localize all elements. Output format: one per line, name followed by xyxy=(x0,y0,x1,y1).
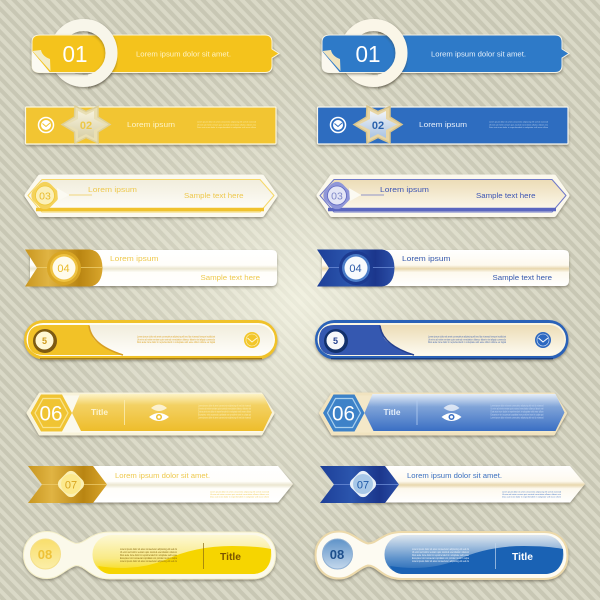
small text block 06 blue: Lorem ipsum dolor sit amet consectetur adipiscing elit sed do eiusmod xyxy=(490,416,544,420)
star badge 02 xyxy=(62,106,110,143)
ribbon seam 07 xyxy=(42,484,107,486)
banner 08 yellow xyxy=(24,532,276,579)
panel 08 xyxy=(92,535,272,574)
pill inner 05 xyxy=(26,323,275,356)
ring 01 back blue xyxy=(346,25,402,81)
band 06 blue xyxy=(364,394,564,431)
banner 05 blue xyxy=(315,320,568,360)
banner 02 yellow xyxy=(26,106,276,144)
number 02: 02 xyxy=(80,120,92,132)
title 06 blue: Title xyxy=(384,408,401,417)
title 04: Lorem ipsum xyxy=(110,254,158,263)
inner panel 03 xyxy=(28,180,274,212)
title 08: Title xyxy=(220,552,241,563)
small text block 07: Ut enim ad minim veniam quis nostrud exercitation ullamco laboris nisi xyxy=(210,493,269,496)
banner 07 yellow xyxy=(28,466,293,503)
number 06: 06 xyxy=(40,402,62,426)
wave 08 blue xyxy=(390,546,563,574)
small text block 07 blue: Duis aute irure dolor in reprehenderit in voluptate velit esse cillum xyxy=(502,496,561,498)
pointer 03 blue xyxy=(349,188,384,201)
small text block 06 blue: Lorem ipsum dolor sit amet consectetur adipiscing elit sed do eiusmod xyxy=(490,404,544,408)
curve shade 05 xyxy=(89,326,123,355)
plate 06 blue xyxy=(320,394,566,434)
number 03: 03 xyxy=(39,190,51,202)
banner 01 blue xyxy=(322,25,569,81)
curve shade 05 blue xyxy=(380,326,414,355)
ring 01 back xyxy=(56,25,112,81)
icon: clock blue xyxy=(330,118,346,132)
number 5: 5 xyxy=(42,336,47,346)
icon: eyes 06 xyxy=(149,404,169,421)
title 03: Lorem ipsum xyxy=(88,185,137,194)
band 07 blue xyxy=(352,466,585,502)
title 04 blue: Lorem ipsum xyxy=(402,254,450,263)
title 02: Lorem ipsum xyxy=(127,120,175,129)
number badge 07 xyxy=(55,468,87,500)
card 02 blue xyxy=(318,107,568,144)
inner panel 03 blue xyxy=(320,180,566,212)
number ball 08 blue xyxy=(322,539,352,569)
pill outer 05 blue xyxy=(315,320,568,360)
banner 07 blue xyxy=(320,466,585,503)
number badge 05 blue xyxy=(324,329,348,353)
small text block 06 blue: Duis aute irure dolor in reprehenderit in voluptate velit esse cillum xyxy=(490,410,544,414)
number badge 05 xyxy=(33,329,57,353)
fill panel 05 blue xyxy=(319,325,564,355)
small text block 08: Duis aute irure dolor in reprehenderit in voluptate velit esse xyxy=(120,554,178,557)
band 06 xyxy=(72,394,272,431)
number badge 04 xyxy=(47,251,81,285)
number ball 08 xyxy=(30,539,60,569)
panel 08 blue xyxy=(384,535,564,574)
ribbon seam 04 xyxy=(37,266,102,268)
small text block 06: Ut enim ad minim veniam quis nostrud exercitation ullamco laboris nisi xyxy=(198,408,251,410)
banner 04 yellow xyxy=(25,250,277,286)
divider 06 blue xyxy=(416,400,418,425)
number 03 blue: 03 xyxy=(331,190,343,202)
small text block 06 blue: Excepteur sint occaecat cupidatat non proident sunt in culpa qui xyxy=(490,414,544,416)
pill bottom line 05 xyxy=(40,358,262,360)
icon: clock 05 blue xyxy=(535,332,551,348)
thick bottom edge 03 xyxy=(36,208,264,211)
caption 04: Sample text here xyxy=(200,275,260,282)
small text block 05: Duis aute irure dolor in reprehenderit in voluptate velit esse cillum dolore eu fugiat xyxy=(137,341,215,344)
small text block 02 blue: Lorem ipsum dolor sit amet consectetur adipiscing elit sed do eiusmod xyxy=(489,120,549,124)
thick bottom edge 03 blue xyxy=(328,208,556,211)
small text block 08: Excepteur sint occaecat cupidatat non proident sunt in culpa xyxy=(120,557,178,560)
small text block 06 blue xyxy=(490,404,544,420)
plate 03 xyxy=(27,177,275,214)
small text block 08 blue: Ut enim ad minim veniam quis nostrud exercitation ullamco xyxy=(412,551,470,554)
ring 01 front blue xyxy=(378,19,408,90)
fill panel 05 xyxy=(28,325,274,355)
small text block 08 blue: Excepteur sint occaecat cupidatat non proident sunt in culpa xyxy=(412,557,470,560)
small text block 02 blue: Ut enim ad minim veniam quis nostrud exercitation ullamco laboris nisi xyxy=(489,124,548,126)
small text block 02: Ut enim ad minim veniam quis nostrud exercitation ullamco laboris nisi xyxy=(197,124,256,126)
ribbon 07 blue xyxy=(320,466,399,503)
ribbon seam 07 blue xyxy=(334,484,399,486)
card 02 xyxy=(26,107,276,144)
caption 03 blue: Sample text here xyxy=(476,193,536,200)
number 08: 08 xyxy=(38,547,52,562)
small text block 05: Ut enim ad minim veniam quis nostrud exercitation ullamco laboris nisi aliquip commodo xyxy=(137,338,216,342)
number badge 03 blue xyxy=(320,179,354,212)
number badge 03 xyxy=(28,179,62,212)
banner 08 blue xyxy=(316,532,568,579)
pointer 03 xyxy=(57,188,92,201)
small text block 06: Lorem ipsum dolor sit amet consectetur adipiscing elit sed do eiusmod xyxy=(198,404,252,408)
ribbon 07 xyxy=(28,466,107,503)
text 01 blue: Lorem ipsum dolor sit amet. xyxy=(431,52,526,58)
number 07 blue: 07 xyxy=(357,480,369,492)
small text block 02: Duis aute irure dolor in reprehenderit in voluptate velit esse cillum xyxy=(197,126,256,129)
small text block 05 blue: Duis aute irure dolor in reprehenderit in voluptate velit esse cillum dolore eu fugiat xyxy=(428,341,506,344)
small text block 07 xyxy=(210,490,270,498)
title 02 blue: Lorem ipsum xyxy=(419,120,467,129)
pill inner 05 blue xyxy=(318,323,566,356)
banner 01 yellow xyxy=(32,25,279,81)
fill shape 05 blue xyxy=(319,325,414,355)
small text block 08 blue xyxy=(412,548,470,563)
ribbon 04 xyxy=(25,250,102,286)
title 07 blue: Lorem ipsum dolor sit amet. xyxy=(407,471,502,480)
banner 06 yellow xyxy=(28,394,273,434)
page curl 01 blue xyxy=(322,50,340,72)
small text block 02 blue: Duis aute irure dolor in reprehenderit in voluptate velit esse cillum xyxy=(489,126,548,129)
small text block 06: Duis aute irure dolor in reprehenderit in voluptate velit esse cillum xyxy=(198,410,251,414)
band 04 xyxy=(30,250,277,286)
plate 06 xyxy=(28,394,273,434)
card 01 blue xyxy=(322,35,569,72)
small text block 02 xyxy=(197,120,257,129)
divider 08 xyxy=(202,543,204,569)
small text block 06: Lorem ipsum dolor sit amet consectetur adipiscing elit sed do eiusmod xyxy=(198,416,252,420)
small text block 06 blue: Ut enim ad minim veniam quis nostrud exercitation ullamco laboris nisi xyxy=(490,408,544,410)
small text block 08: Lorem ipsum dolor sit amet consectetur adipiscing elit sed do xyxy=(120,560,178,563)
small text block 06: Excepteur sint occaecat cupidatat non proident sunt in culpa qui xyxy=(198,414,251,416)
pill outer 05 xyxy=(24,320,278,360)
card 01 xyxy=(32,35,279,72)
number 02 blue: 02 xyxy=(372,120,384,132)
hexagon badge 06 blue xyxy=(323,394,364,432)
small text block 02: Lorem ipsum dolor sit amet consectetur adipiscing elit sed do eiusmod xyxy=(197,120,257,124)
icon: clock 05 xyxy=(244,332,260,348)
ribbon seam 04 blue xyxy=(329,266,394,268)
band 04 blue xyxy=(322,250,569,286)
pill bottom line 05 blue xyxy=(331,358,553,360)
number 5 blue: 5 xyxy=(333,336,338,346)
small text block 05: Lorem ipsum dolor sit amet consectetur adipiscing elit sed do eiusmod tempor incididunt xyxy=(137,336,215,338)
number badge 07 blue xyxy=(347,468,379,500)
text 01: Lorem ipsum dolor sit amet. xyxy=(136,52,231,58)
number 01: 01 xyxy=(62,41,88,67)
title 07: Lorem ipsum dolor sit amet. xyxy=(115,471,210,480)
icon: eyes 06 blue xyxy=(442,404,462,421)
small text block 05 blue xyxy=(428,336,507,344)
banner 03 blue xyxy=(319,177,567,214)
page curl 01 xyxy=(32,50,50,72)
divider 06 xyxy=(124,400,126,425)
banner 06 blue xyxy=(320,394,566,434)
divider 08 blue xyxy=(494,543,496,569)
plate 08 blue xyxy=(316,532,568,579)
caption 03: Sample text here xyxy=(184,193,244,200)
small text block 05 blue: Lorem ipsum dolor sit amet consectetur adipiscing elit sed do eiusmod tempor incididunt xyxy=(428,336,506,338)
small text block 05 blue: Ut enim ad minim veniam quis nostrud exercitation ullamco laboris nisi aliquip commodo xyxy=(428,338,507,342)
title 03 blue: Lorem ipsum xyxy=(380,185,429,194)
number 07: 07 xyxy=(65,480,77,492)
small text block 07 blue: Ut enim ad minim veniam quis nostrud exercitation ullamco laboris nisi xyxy=(502,493,561,496)
small text block 07 blue: Lorem ipsum dolor sit amet consectetur adipiscing elit sed do eiusmod xyxy=(502,490,562,494)
caption 04 blue: Sample text here xyxy=(492,275,552,282)
ring 01 front xyxy=(88,19,118,90)
number 01 blue: 01 xyxy=(356,41,380,67)
plate 03 blue xyxy=(319,177,567,214)
small text block 02 blue xyxy=(489,120,549,129)
number 04: 04 xyxy=(57,263,70,275)
wave 08 xyxy=(98,546,271,574)
plate 08 xyxy=(24,532,276,579)
small text block 08 xyxy=(120,548,178,563)
banner 04 blue xyxy=(317,250,569,286)
number 06 blue: 06 xyxy=(332,402,355,426)
hexagon badge 06 xyxy=(30,394,72,432)
title 06: Title xyxy=(91,408,109,417)
small text block 06 xyxy=(198,404,252,420)
small text block 07: Duis aute irure dolor in reprehenderit in voluptate velit esse cillum xyxy=(210,496,269,498)
small text block 07 blue xyxy=(502,490,562,498)
small text block 08 blue: Lorem ipsum dolor sit amet consectetur adipiscing elit sed do xyxy=(412,560,470,563)
number badge 04 blue xyxy=(339,251,373,285)
band 07 xyxy=(60,466,293,502)
small text block 08: Lorem ipsum dolor sit amet consectetur adipiscing elit sed do xyxy=(120,548,178,551)
banner 05 yellow xyxy=(24,320,278,360)
small text block 08: Ut enim ad minim veniam quis nostrud exercitation ullamco xyxy=(120,551,178,554)
small text block 07: Lorem ipsum dolor sit amet consectetur adipiscing elit sed do eiusmod xyxy=(210,490,270,494)
small text block 05 xyxy=(137,336,216,344)
fill shape 05 xyxy=(28,325,123,355)
small text block 08 blue: Lorem ipsum dolor sit amet consectetur adipiscing elit sed do xyxy=(412,548,470,551)
title 08 blue: Title xyxy=(512,552,533,563)
small text block 08 blue: Duis aute irure dolor in reprehenderit in voluptate velit esse xyxy=(412,554,470,557)
number 04 blue: 04 xyxy=(349,263,362,275)
banner 02 blue xyxy=(318,106,568,144)
banner 03 yellow xyxy=(27,177,275,214)
number 08 blue: 08 xyxy=(330,547,344,562)
ribbon 04 blue xyxy=(317,250,394,286)
icon: clock xyxy=(38,118,54,132)
star badge 02 blue xyxy=(354,106,402,143)
